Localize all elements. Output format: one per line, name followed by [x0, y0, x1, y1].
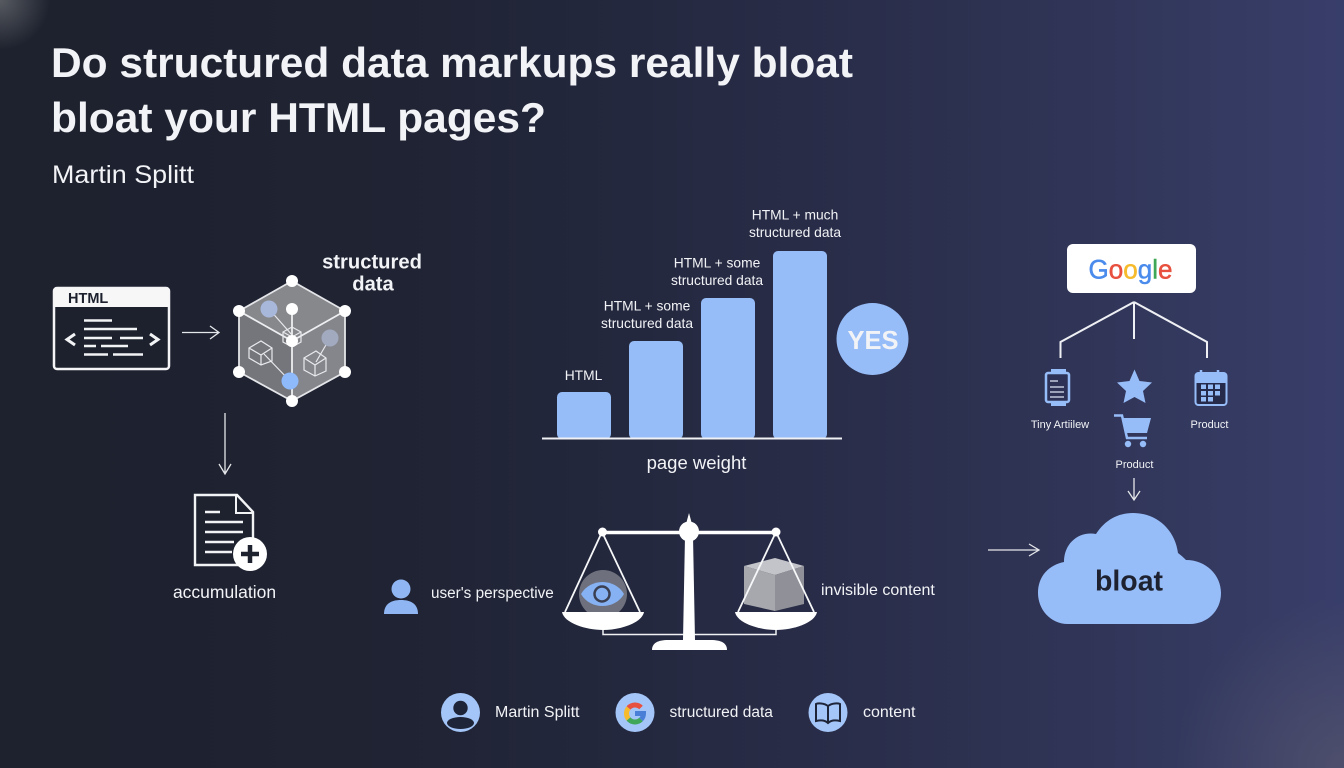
legend: structured data	[616, 693, 773, 732]
legend: Martin Splitt: Martin Splitt	[495, 704, 580, 721]
bar chart: page weight: HTML	[565, 368, 603, 383]
tree connector lines	[1060, 302, 1207, 358]
icon: Google box: Google	[1088, 254, 1172, 284]
labels: tree items: Tiny Artiilew	[1031, 419, 1089, 431]
title: Do structured data markups really bloat	[51, 39, 853, 86]
bar chart: page weight: HTML + some	[604, 298, 691, 314]
icon: shopping cart	[1114, 416, 1151, 447]
legend: content: content	[863, 704, 916, 721]
title: bloat your HTML pages?	[51, 94, 546, 141]
arrow: down to bloat	[1128, 478, 1140, 500]
label: structured data: structured	[322, 252, 422, 274]
legend: Martin Splitt	[441, 693, 580, 732]
label: invisible content: invisible content	[821, 582, 935, 599]
icon: Google box	[1067, 244, 1196, 293]
bar chart: page weight: structured data	[749, 225, 841, 240]
label: accumulation: accumulation	[173, 582, 276, 602]
bar: HTML + some structured data 2	[701, 298, 755, 439]
legend	[441, 693, 916, 732]
icon: document with plus	[195, 495, 267, 571]
labels: tree items: Product	[1116, 459, 1153, 471]
bar chart: page weight: structured data	[671, 273, 763, 288]
title	[51, 39, 853, 141]
bar: HTML + some structured data	[629, 341, 683, 439]
bar chart: page weight: structured data	[601, 316, 693, 331]
legend: content	[808, 693, 916, 732]
cube in right pan	[744, 558, 804, 611]
icon: structured data cube	[233, 275, 351, 407]
labels: tree items	[1031, 419, 1228, 471]
icon: article	[1046, 369, 1069, 406]
bar chart: page weight	[542, 208, 842, 473]
icon: HTML window: HTML	[68, 291, 108, 307]
callout: YES	[836, 303, 908, 375]
legend: structured data: structured data	[670, 704, 773, 721]
icon: bloat cloud: bloat	[1095, 566, 1164, 598]
arrow: down to accumulation	[219, 413, 231, 474]
label: structured data: data	[352, 274, 395, 296]
icon: star	[1117, 370, 1152, 403]
arrow: HTML to structured data	[182, 326, 219, 339]
bar chart: page weight: page weight	[647, 452, 746, 473]
callout: YES: YES	[847, 327, 899, 355]
bar chart: page weight: HTML + much	[752, 208, 838, 222]
icon: user	[384, 580, 418, 614]
subtitle: author: Martin Splitt	[52, 161, 194, 189]
bar: HTML + much structured data	[773, 251, 827, 439]
icon: balance scale	[562, 513, 817, 650]
icon: calendar	[1195, 370, 1227, 405]
labels: tree items: Product	[1191, 419, 1228, 431]
icon: bloat cloud	[1038, 513, 1221, 624]
icon: HTML window	[54, 288, 169, 369]
arrow: right to bloat	[988, 544, 1039, 556]
bar chart: page weight: HTML + some	[674, 256, 761, 270]
bar: HTML	[557, 392, 611, 439]
eye in left pan	[579, 570, 627, 618]
label: structured data	[322, 252, 422, 296]
label: user's perspective: user's perspective	[431, 585, 554, 602]
